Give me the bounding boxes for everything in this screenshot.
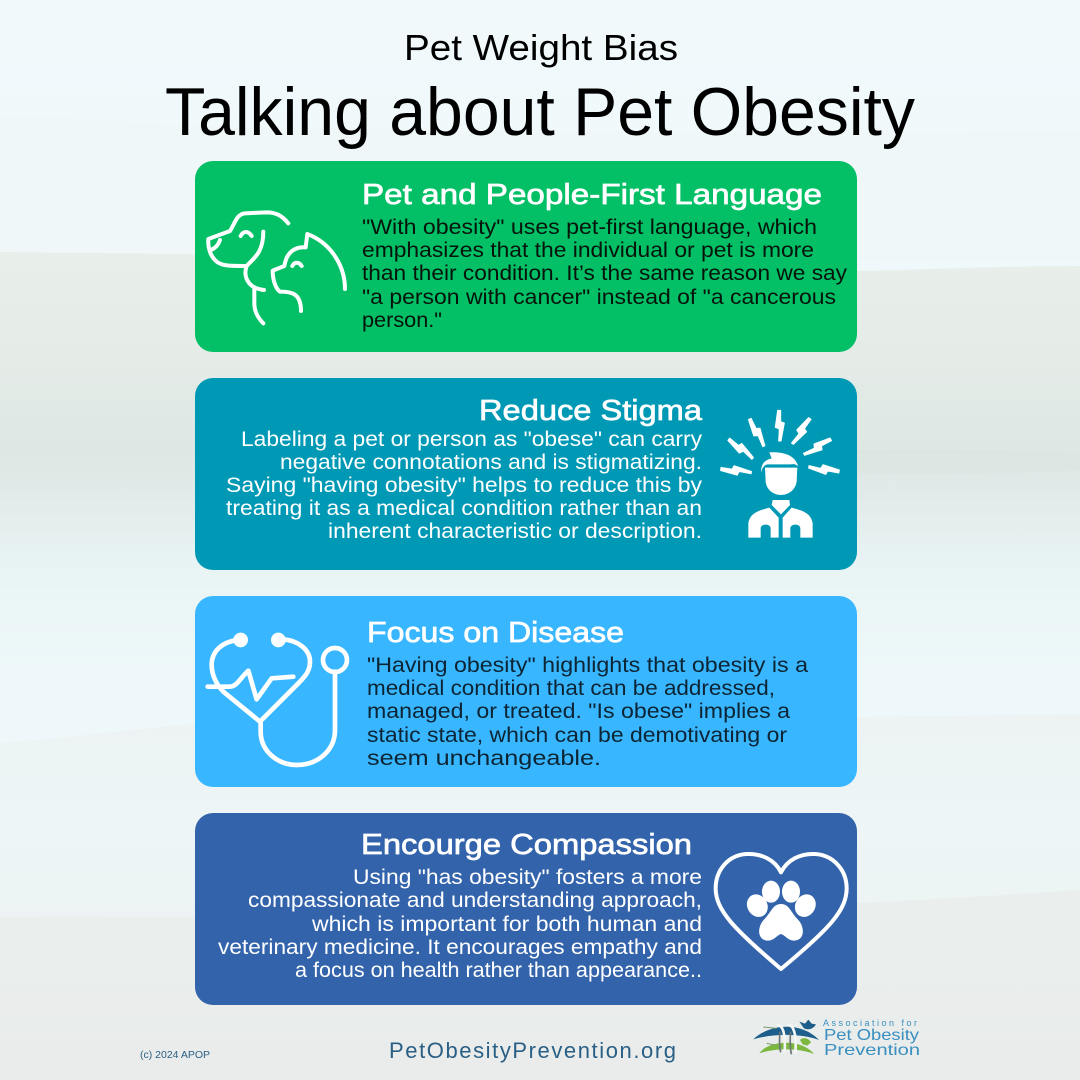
logo: association for pet obesity prevention: Prevention — [824, 1042, 920, 1059]
heading: Reduce Stigma — [479, 395, 703, 427]
icon: dog and cat — [208, 212, 345, 323]
body text: treating it as a medical condition rather than an — [226, 497, 702, 520]
body text: inherent characteristic or description. — [328, 520, 702, 543]
icon: stethoscope — [208, 633, 347, 765]
body text: than their condition. It’s the same reason we say — [362, 262, 848, 285]
panel: pet and people-first language — [195, 161, 857, 352]
heading: Focus on Disease — [367, 617, 624, 649]
panel: encourage compassion — [195, 813, 857, 1005]
panel: focus on disease — [195, 596, 857, 787]
body text: which is important for both human and — [311, 913, 702, 936]
body text: a focus on health rather than appearance.. — [295, 959, 702, 982]
body text: person." — [362, 309, 442, 332]
logo mark — [753, 1020, 819, 1054]
heading: Encourge Compassion — [361, 829, 692, 861]
body text: negative connotations and is stigmatizing. — [280, 451, 702, 474]
body text: "a person with cancer" instead of "a cancerous — [362, 286, 836, 309]
body text: emphasizes that the individual or pet is more — [362, 239, 814, 262]
panel: reduce stigma — [195, 378, 857, 570]
body text: seem unchangeable. — [367, 747, 601, 770]
body text — [362, 216, 848, 332]
title: Talking about Pet Obesity — [165, 74, 915, 150]
body text: veterinary medicine. It encourages empathy and — [218, 936, 702, 959]
website: PetObesityPrevention.org — [389, 1038, 676, 1063]
icon: heart with paw — [716, 854, 847, 969]
body text: Using "has obesity" fosters a more — [353, 866, 702, 889]
body text: medical condition that can be addressed, — [367, 677, 775, 700]
body text — [226, 428, 703, 543]
heading: Pet and People-First Language — [362, 179, 822, 211]
body text: "With obesity" uses pet-first language, which — [362, 216, 817, 239]
body text: compassionate and understanding approach, — [248, 889, 702, 912]
body text: "Having obesity" highlights that obesity is a — [367, 654, 808, 677]
body text: managed, or treated. "Is obese" implies a — [367, 700, 790, 723]
body text: static state, which can be demotivating or — [367, 724, 787, 747]
body text: Labeling a pet or person as "obese" can carry — [241, 428, 703, 451]
body text — [218, 866, 702, 982]
logo: association for pet obesity prevention — [753, 1018, 920, 1059]
icon: stressed person — [720, 410, 840, 538]
copyright: (c) 2024 APOP — [140, 1050, 210, 1061]
body text — [367, 654, 808, 770]
logo: association for pet obesity prevention: Pet Obesity — [824, 1027, 919, 1044]
logo text: Association for — [823, 1018, 917, 1028]
body text: Saying "having obesity" helps to reduce this by — [226, 474, 703, 497]
subtitle: Pet Weight Bias — [404, 27, 678, 68]
